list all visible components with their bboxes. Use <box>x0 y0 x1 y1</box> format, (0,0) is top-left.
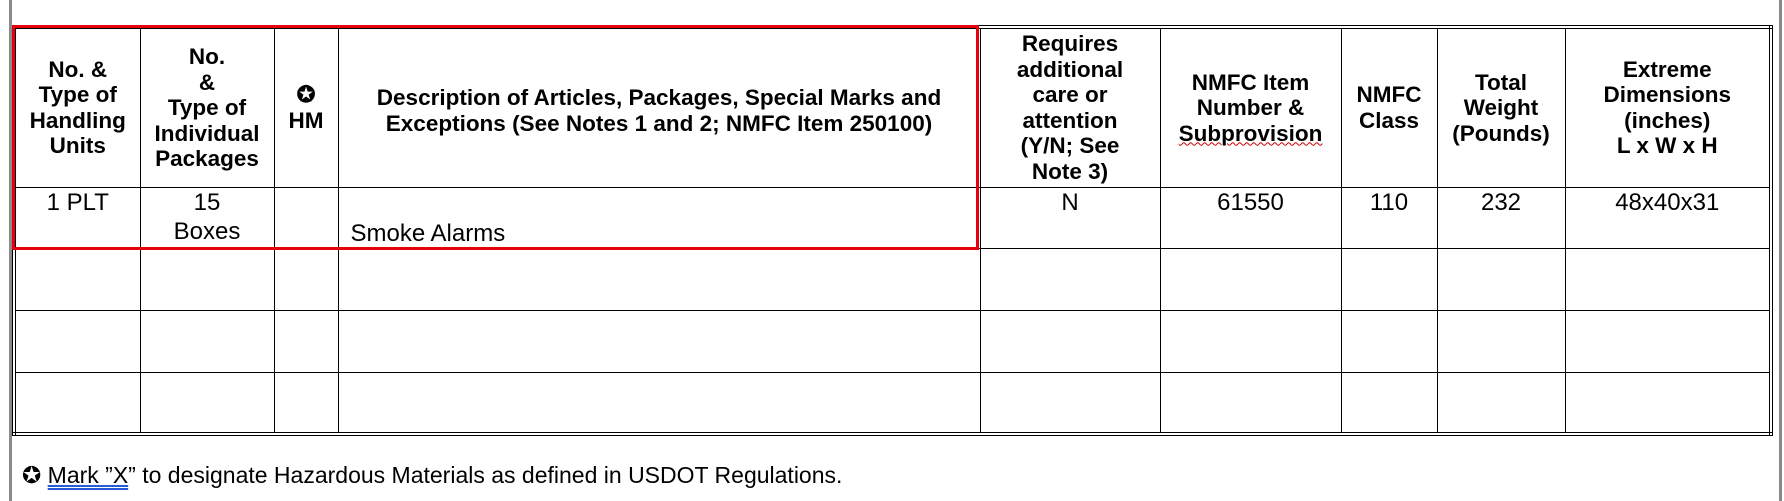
data row 1: 110 <box>1370 188 1408 216</box>
header row: (inches) <box>1624 108 1710 133</box>
footnote: ✪ Mark ”X” to designate Hazardous Materials as defined in USDOT Regulations. <box>22 462 842 488</box>
data row 1: 15 <box>194 188 220 216</box>
header row: care or <box>1032 82 1108 107</box>
header row: HM <box>288 108 324 133</box>
header row: Weight <box>1464 95 1538 120</box>
data row 1: 61550 <box>1217 188 1284 216</box>
header row: (Y/N; See <box>1021 133 1119 158</box>
header row: Type of <box>168 95 246 120</box>
data row 1: Boxes <box>174 218 240 244</box>
header row: Packages <box>155 146 259 171</box>
header row: & <box>199 70 215 94</box>
data row 1 <box>47 188 1719 246</box>
header row: No. & <box>48 57 107 82</box>
header row: ✪ <box>297 82 315 107</box>
header row: Note 3) <box>1032 159 1108 184</box>
header row: (Pounds) <box>1452 120 1550 146</box>
header row: Number & <box>1197 95 1304 120</box>
header row: Handling <box>30 108 126 133</box>
header row: additional <box>1017 57 1123 82</box>
header row: Type of <box>39 82 117 107</box>
data row 1: 1 PLT <box>47 188 109 216</box>
data row 1: 232 <box>1481 188 1521 216</box>
data row 1: 48x40x31 <box>1615 188 1719 216</box>
data row 1: Smoke Alarms <box>350 220 505 246</box>
header row: NMFC Item <box>1192 70 1309 94</box>
header row: L x W x H <box>1617 133 1718 158</box>
header row: No. <box>189 44 225 69</box>
header row: Extreme <box>1623 57 1712 82</box>
callout: red highlight box <box>12 25 979 250</box>
header row: Requires <box>1022 31 1118 56</box>
header row: Total <box>1475 70 1527 94</box>
data row 1: N <box>1061 188 1079 216</box>
header row: attention <box>1022 108 1118 133</box>
header row: Dimensions <box>1603 82 1731 107</box>
header row: Individual <box>154 120 260 146</box>
header row: Class <box>1359 108 1419 133</box>
header row: Exceptions (See Notes 1 and 2; NMFC Item 250100) <box>386 110 932 136</box>
header row: Units <box>50 133 106 158</box>
header row: Description of Articles, Packages, Special Marks and <box>377 85 941 110</box>
header row: NMFC <box>1356 82 1421 107</box>
header row: Subprovision <box>1179 120 1322 146</box>
